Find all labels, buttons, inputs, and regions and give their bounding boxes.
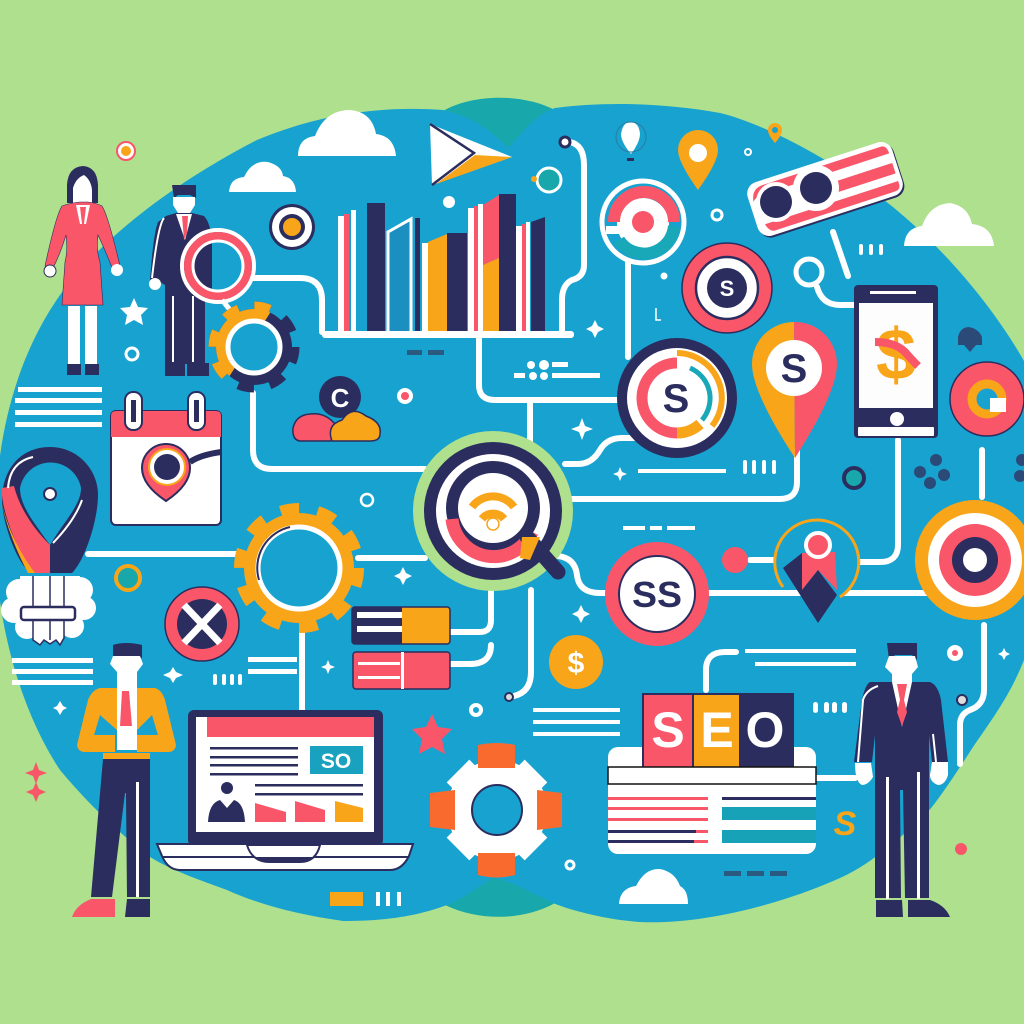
- icon: central magnifier: [413, 431, 573, 591]
- small ring marker: [531, 137, 570, 192]
- icon: orange S: S: [834, 805, 857, 843]
- sparkles left: [25, 762, 47, 802]
- icon: female figure: [44, 166, 123, 375]
- connector lines: [88, 142, 984, 778]
- icon: text bars: [352, 607, 450, 689]
- text lines left: [12, 298, 1010, 869]
- icon: SEO block: S: [651, 702, 685, 758]
- icon: SEO block: [608, 693, 816, 854]
- icon: large gear: [240, 509, 358, 627]
- text dots and lines under chart: [443, 196, 776, 623]
- icon: orange location pin: [656, 123, 782, 320]
- bar chart: [322, 194, 574, 355]
- icon: no symbol: [165, 587, 239, 661]
- icon: small gear: [213, 306, 295, 388]
- clouds: [229, 110, 994, 904]
- icon: suited man with magnifier: [149, 185, 254, 376]
- icon: white and orange gear: [430, 743, 562, 878]
- icon: dollar coin: $: [568, 647, 585, 680]
- icon: SS badge: SS: [632, 574, 682, 615]
- icon: right ring badge: [950, 327, 1024, 436]
- icon: mountain pin: [722, 520, 859, 623]
- small ring icon: [117, 142, 315, 250]
- icon: large orange target: [915, 500, 1024, 620]
- icon: laptop: SO: [321, 750, 351, 773]
- icon: right suited man: [854, 643, 950, 917]
- icon: calendar with pin: [111, 392, 221, 525]
- icon: cloud with C: C: [331, 383, 350, 413]
- icon: light bulb: [616, 122, 646, 161]
- icon: cloud with C: [293, 376, 413, 441]
- icon: light bulb pin left: [1, 447, 98, 645]
- icon: S ring: S: [663, 377, 689, 421]
- dashes: [623, 526, 787, 876]
- icon: left orange man: [72, 643, 176, 917]
- icon: play arrow: [430, 124, 512, 185]
- icon: laptop: [157, 710, 413, 870]
- icon: S location pin: [752, 322, 837, 458]
- icon: SS badge: [605, 542, 709, 646]
- icon: smartphone: [854, 285, 938, 438]
- icon: S location pin: S: [781, 347, 807, 391]
- icon: dollar ring: S: [720, 276, 734, 301]
- icon: SEO block: O: [746, 702, 784, 758]
- icon: small flower and ring: [844, 454, 1024, 489]
- red dot: [955, 843, 967, 855]
- icon: eyes billboard: [744, 139, 908, 255]
- icon: star: [412, 714, 452, 754]
- icon: target circle top: [602, 181, 684, 263]
- small ring: [796, 259, 822, 285]
- dotted marks: [813, 645, 967, 713]
- icon: dollar coin: [549, 635, 603, 689]
- icon: S ring: [617, 338, 737, 458]
- icon: dollar ring: [682, 243, 772, 333]
- icon: smartphone: $: [876, 315, 916, 395]
- orange ring: [116, 566, 140, 590]
- icon: SEO block: E: [700, 702, 734, 758]
- orange bar pair: [330, 892, 401, 906]
